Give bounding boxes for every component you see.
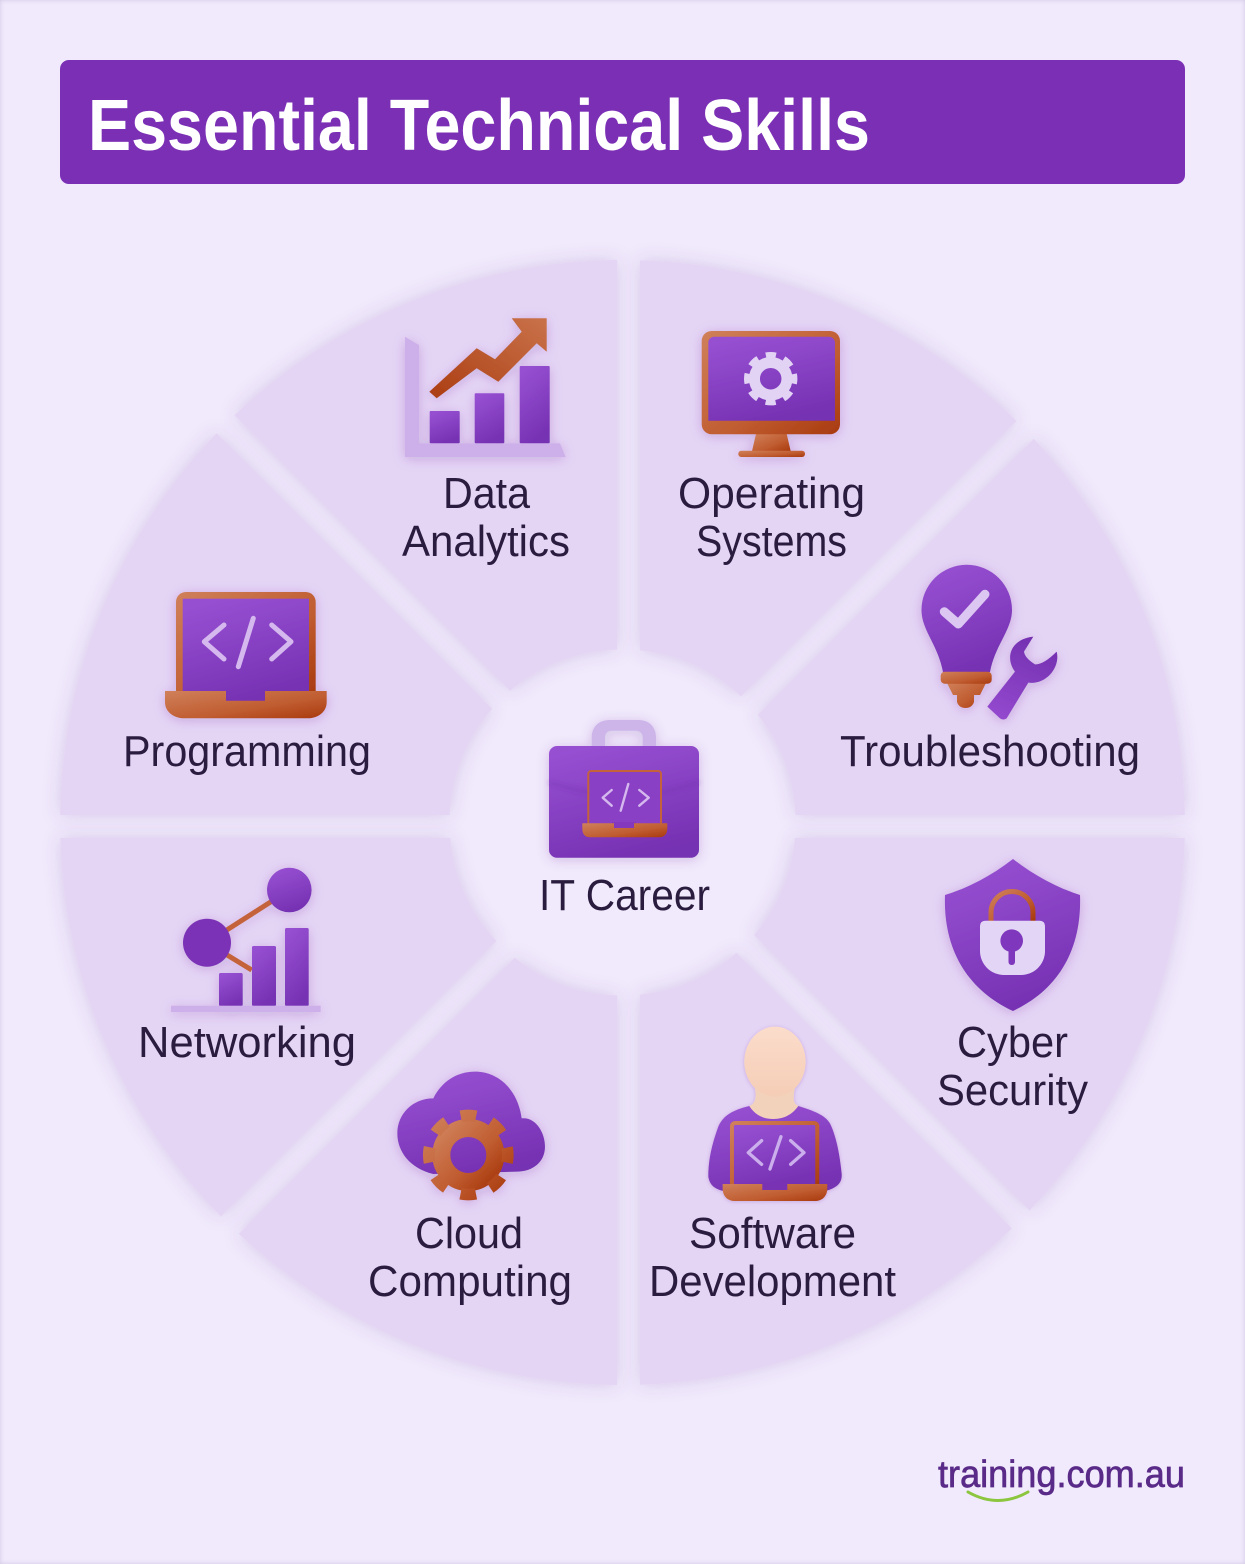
- logo smile: [968, 1492, 1028, 1500]
- segment: troubleshooting: [758, 439, 1185, 815]
- panel: cloud computing: [239, 958, 617, 1385]
- logo: training.com.au: training.com.au: [938, 1454, 1185, 1496]
- icon: network nodes and bars: [171, 868, 321, 1012]
- icon: monitor with gear: [702, 331, 840, 457]
- icon: rising bar chart: [405, 318, 566, 457]
- icon: light bulb and wrench: [922, 565, 1057, 719]
- label: software development: Software: [689, 1209, 856, 1258]
- label: it career: IT Career: [539, 871, 710, 920]
- label: cyber security: [937, 1018, 1088, 1115]
- segment: data analytics: [234, 260, 617, 691]
- label: troubleshooting: Troubleshooting: [840, 727, 1140, 776]
- label: operating systems: Systems: [696, 517, 847, 566]
- label: cloud computing: Computing: [368, 1257, 572, 1306]
- label: software development: [649, 1209, 896, 1306]
- panel: cyber security: [754, 838, 1185, 1211]
- panel: operating systems: [640, 260, 1016, 696]
- panel: programming: [60, 433, 492, 815]
- label: operating systems: [678, 469, 865, 566]
- label: cyber security: Cyber: [957, 1018, 1068, 1067]
- panel: networking: [60, 838, 496, 1216]
- label: cloud computing: Cloud: [415, 1209, 523, 1258]
- segment: programming: [60, 433, 492, 815]
- icon: shield with padlock: [945, 859, 1080, 1011]
- segment: networking: [60, 838, 496, 1216]
- segment: cloud computing: [239, 958, 617, 1385]
- label: programming: Programming: [123, 727, 371, 776]
- label: cyber security: Security: [937, 1066, 1088, 1115]
- icon: laptop with code: [165, 592, 327, 718]
- label: data analytics: [402, 469, 570, 566]
- panel: software development: [640, 953, 1012, 1385]
- label: networking: Networking: [138, 1018, 356, 1067]
- title banner: [60, 60, 1185, 184]
- segment: cyber security: [754, 838, 1185, 1211]
- icon: developer with laptop: [708, 1027, 842, 1201]
- panel: troubleshooting: [758, 439, 1185, 815]
- label: software development: Development: [649, 1257, 896, 1306]
- segment: software development: [640, 953, 1012, 1385]
- panel: data analytics: [234, 260, 617, 691]
- icon: briefcase with laptop: [549, 720, 699, 858]
- label: cloud computing: [368, 1209, 572, 1306]
- label: data analytics: Data: [443, 469, 530, 518]
- title text: Essential Technical Skills: [88, 86, 870, 166]
- segment: operating systems: [640, 260, 1016, 696]
- label: data analytics: Analytics: [402, 517, 570, 566]
- centre hub: it career: [539, 720, 710, 920]
- icon: cloud with gear: [397, 1072, 545, 1194]
- label: operating systems: Operating: [678, 469, 865, 518]
